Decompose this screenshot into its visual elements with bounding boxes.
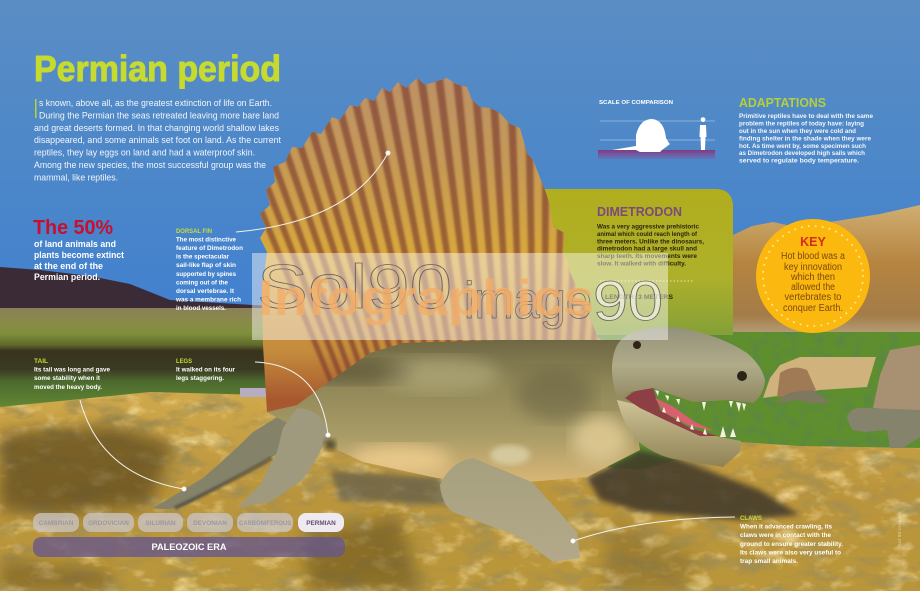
landscape: sand patch behind distant animals bbox=[763, 357, 876, 398]
body shading bbox=[290, 357, 628, 475]
watermark: 90 bbox=[593, 269, 663, 332]
annotation: legs: It walked on its four bbox=[176, 366, 235, 374]
mouth interior and tongue bbox=[625, 388, 718, 436]
annotation: dorsal fin: feature of Dimetrodon bbox=[176, 245, 243, 252]
chart: scale of comparison: SCALE OF COMPARISON bbox=[599, 100, 673, 106]
text block: introduction: During the Permian the seas retreated leaving more bare land bbox=[39, 110, 279, 120]
annotation: tail: moved the heavy body. bbox=[34, 384, 102, 391]
pill: Ordovician bbox=[83, 513, 134, 532]
annotation: dorsal fin: supported by spines bbox=[176, 271, 236, 278]
text block: adaptations: problem the reptiles of today have: laying bbox=[739, 120, 864, 128]
pill: Carboniferous bbox=[237, 513, 293, 532]
main illustration: dimetrodon bbox=[153, 70, 765, 562]
landscape: dinosaur shadow on the ground bbox=[587, 450, 800, 520]
leader line: tail bbox=[80, 400, 186, 491]
body bbox=[267, 340, 640, 483]
landscape: sandy foreground bbox=[0, 392, 920, 591]
icon: dimetrodon silhouette bbox=[612, 119, 670, 152]
watermark bbox=[252, 253, 668, 340]
annotation: dorsal fin: was a membrane rich bbox=[175, 297, 241, 304]
timeline: geological periods bbox=[33, 513, 344, 532]
dorsal sail bbox=[260, 78, 602, 412]
leader line: dorsal fin bbox=[236, 151, 390, 232]
landscape: cliffs on the right bbox=[733, 205, 920, 335]
lower jaw bbox=[617, 400, 741, 467]
callout: Key bbox=[756, 219, 870, 333]
text block: introduction: reptiles, they lay eggs on land and had a waterproof skin. bbox=[34, 148, 255, 158]
text block: Dimetrodon description: dimetrodon had a large skull and bbox=[597, 246, 697, 252]
text block: Key: allowed the bbox=[791, 282, 835, 293]
text block: adaptations: served to regulate body temperature. bbox=[739, 158, 859, 164]
text block: adaptations: finding shelter in the shade when they were bbox=[739, 136, 871, 142]
bar: Paleozoic era bbox=[33, 537, 345, 557]
heading: Key: KEY bbox=[800, 235, 827, 249]
annotation: dorsal fin: The most distinctive bbox=[176, 236, 236, 244]
text block: Dimetrodon description: three meters. Unlike the dinosaurs, bbox=[597, 238, 704, 246]
annotation: claws: CLAWS bbox=[740, 515, 763, 522]
rear leg bbox=[237, 408, 328, 508]
landscape: green meadow on the right bbox=[400, 332, 920, 485]
text block: Key: which then bbox=[790, 272, 835, 283]
pill: Devonian: DEVONIAN bbox=[193, 520, 227, 527]
text block: Dimetrodon description: sharp teeth. Its movements were bbox=[597, 253, 697, 260]
stat: length: LENGTH: 3 METERS bbox=[605, 294, 674, 301]
text block: Dimetrodon description: Was a very aggressive prehistoric bbox=[597, 224, 699, 230]
annotation: legs: LEGS bbox=[176, 358, 193, 365]
text block: Dimetrodon description bbox=[597, 224, 704, 268]
heading: adaptations: ADAPTATIONS bbox=[739, 95, 826, 110]
annotation: dorsal fin: in blood vessels. bbox=[176, 305, 226, 312]
icon: human silhouette bbox=[700, 117, 706, 150]
bar: Paleozoic era: PALEOZOIC ERA bbox=[152, 542, 227, 553]
chart: scale of comparison bbox=[598, 100, 715, 159]
text block: adaptations: out in the sun when they were cold and bbox=[739, 128, 856, 135]
distant dimetrodon, large bbox=[847, 345, 920, 448]
watermark: Infographics bbox=[258, 270, 594, 326]
eye bbox=[633, 341, 641, 349]
text block: adaptations: hot. As time went by, some specimen such bbox=[739, 143, 866, 150]
text block: introduction: and great deserts formed. In that changing world shallow lakes bbox=[34, 123, 279, 133]
annotation: dorsal fin: DORSAL FIN bbox=[176, 228, 212, 235]
annotation: tail bbox=[34, 358, 110, 391]
annotation: claws: trap small animals. bbox=[740, 558, 798, 565]
pill: Silurian: SILURIAN bbox=[145, 520, 176, 527]
title: Permian period bbox=[34, 48, 281, 89]
small purple tag behind the sail bbox=[240, 388, 266, 397]
text block: adaptations: Primitive reptiles have to deal with the same bbox=[739, 113, 873, 120]
pill: Silurian bbox=[138, 513, 183, 532]
annotation: tail: some stability when it bbox=[34, 375, 101, 382]
pill: Carboniferous: CARBONIFEROUS bbox=[239, 520, 292, 527]
sky background bbox=[0, 0, 920, 345]
pill: Cambrian: CAMBRIAN bbox=[39, 520, 74, 527]
annotation: claws: claws were in contact with the bbox=[740, 532, 831, 539]
text block: introduction: disappeared, and some animals set foot on land. As the current bbox=[34, 135, 281, 145]
annotation: tail: Its tail was long and gave bbox=[34, 366, 110, 374]
text block: adaptations: as Dimetrodon developed high sails which bbox=[739, 150, 865, 157]
stat: the 50%: The 50% bbox=[33, 217, 113, 239]
nostril bbox=[737, 371, 747, 381]
stat: the 50%: plants become extinct bbox=[34, 250, 125, 261]
annotation: claws: Its claws were also very useful to bbox=[740, 550, 841, 556]
stat: the 50% bbox=[33, 217, 125, 283]
annotation: claws: ground to ensure greater stability. bbox=[740, 541, 843, 548]
panel: Dimetrodon text bbox=[597, 205, 704, 301]
text block: Dimetrodon description: slow. It walked with difficulty. bbox=[597, 260, 686, 268]
annotation: dorsal fin bbox=[175, 228, 243, 312]
tail bbox=[153, 405, 320, 509]
heading: Dimetrodon: DIMETRODON bbox=[597, 205, 682, 219]
text block: Key: conquer Earth. bbox=[783, 303, 843, 314]
text block: Key bbox=[781, 251, 845, 314]
landscape: dark ground patches bbox=[0, 425, 700, 591]
leader line: claws bbox=[571, 517, 735, 543]
stat: the 50%: of land animals and bbox=[34, 239, 116, 250]
annotation: claws bbox=[740, 515, 843, 565]
text block: Dimetrodon description: animal which could reach length of bbox=[597, 231, 698, 238]
pill: Ordovician: ORDOVICIAN bbox=[88, 520, 129, 527]
text block: Key: Hot blood was a bbox=[781, 251, 845, 262]
text block: introduction: s known, above all, as the greatest extinction of life on Earth. bbox=[39, 98, 272, 108]
annotation: dorsal fin: is the spectacular bbox=[176, 254, 229, 261]
annotation: legs: legs staggering. bbox=[176, 375, 224, 382]
distant dimetrodon, small bbox=[777, 368, 830, 403]
text block: introduction: mammal, like reptiles. bbox=[34, 172, 118, 182]
text block: Key: vertebrates to bbox=[784, 292, 842, 303]
teeth bbox=[655, 390, 746, 437]
annotation: tail: TAIL bbox=[34, 358, 48, 365]
text block: Key: key innovation bbox=[784, 262, 842, 273]
pill: Permian bbox=[298, 513, 344, 532]
text block: adaptations bbox=[739, 95, 873, 164]
annotation: dorsal fin: dorsal vertebrae. It bbox=[176, 288, 235, 295]
annotation: dorsal fin: sail-like flap of skin bbox=[176, 262, 236, 269]
panel: Dimetrodon background bbox=[545, 189, 733, 335]
upper jaw and head bbox=[612, 327, 765, 403]
stat: the 50%: at the end of the bbox=[34, 261, 103, 272]
front leg bbox=[440, 458, 580, 562]
credit: vertical: Sol 90 images bbox=[897, 511, 902, 547]
leader line: legs bbox=[255, 362, 330, 437]
watermark: image bbox=[464, 272, 592, 330]
annotation: dorsal fin: coming out of the bbox=[176, 279, 228, 286]
pill: Permian: PERMIAN bbox=[306, 520, 336, 527]
pill: Devonian bbox=[187, 513, 233, 532]
landscape: distant hills on the left bbox=[0, 267, 270, 345]
annotation: legs bbox=[176, 358, 235, 382]
stat: the 50%: Permian period. bbox=[34, 272, 100, 283]
watermark: Sol90 bbox=[257, 253, 452, 322]
annotation: claws: When it advanced crawling, its bbox=[740, 524, 832, 530]
landscape: fields on the left bbox=[0, 308, 620, 418]
text block: introduction bbox=[34, 98, 281, 182]
pill: Cambrian bbox=[33, 513, 79, 532]
text block: introduction: Among the new species, the most successful group was the bbox=[34, 160, 266, 170]
